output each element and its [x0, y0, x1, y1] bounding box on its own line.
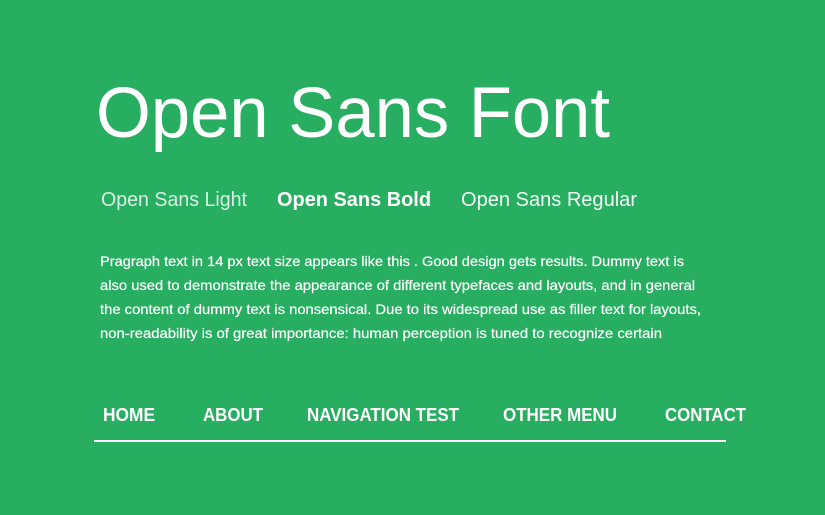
nav item: navigation test: NAVIGATION TEST — [307, 405, 459, 425]
font weight samples — [101, 189, 637, 211]
paragraph text: Pragraph text in 14 px text size appears like this . Good design gets results. Dummy text is — [100, 253, 684, 269]
bold sample: Open Sans Bold — [277, 189, 431, 211]
paragraph text — [100, 253, 701, 341]
title: Open Sans Font — [96, 74, 610, 153]
nav item: home: HOME — [103, 405, 155, 425]
paragraph text: non-readability is of great importance: human perception is tuned to recognize certain — [100, 325, 662, 341]
light sample: Open Sans Light — [101, 189, 247, 211]
regular sample: Open Sans Regular — [461, 189, 637, 211]
nav item: about: ABOUT — [203, 405, 263, 425]
nav item: other menu: OTHER MENU — [503, 405, 617, 425]
navigation underline — [94, 440, 726, 442]
paragraph text: the content of dummy text is nonsensical. Due to its widespread use as filler text for layouts, — [100, 301, 701, 317]
navigation menu — [103, 405, 746, 425]
nav item: contact: CONTACT — [665, 405, 746, 425]
paragraph text: also used to demonstrate the appearance of different typefaces and layouts, and in general — [100, 277, 695, 293]
